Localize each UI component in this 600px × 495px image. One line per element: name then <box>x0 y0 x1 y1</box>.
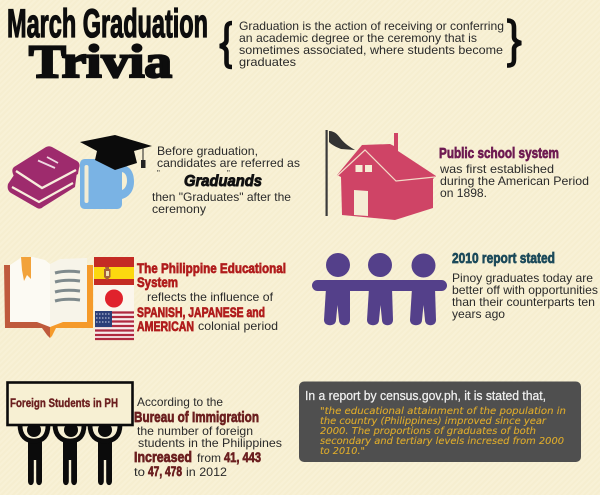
philippine educational system text block: The Philippine Educational <box>137 260 286 276</box>
definition text block: Graduation is the action of receiving or conferring <box>239 19 504 33</box>
2010 report text block: better off with opportunities <box>452 283 598 297</box>
graduands text block: Graduands <box>184 173 262 190</box>
title: Trivia <box>29 36 172 88</box>
graduands text block: candidates are referred as <box>157 156 300 170</box>
icon: Japanese flag <box>94 285 134 311</box>
definition text block <box>220 19 521 69</box>
foreign students text block: students in the Philippines <box>138 436 282 450</box>
foreign students text block: 47, 478 <box>148 463 182 479</box>
philippine educational system text block: SPANISH, JAPANESE and <box>137 304 265 320</box>
philippine educational system text block: colonial period <box>198 319 278 333</box>
graduands text block <box>152 144 300 216</box>
2010 report text block <box>452 250 598 321</box>
public school system text block: Public school system <box>439 145 559 162</box>
panel: census report callout <box>299 382 581 462</box>
foreign students text block: in 2012 <box>186 465 227 479</box>
icon: blue mug <box>80 159 134 209</box>
public school system text block: during the American Period <box>440 174 589 188</box>
panel: census report callout: 2000. The proportions of graduates of both <box>320 426 536 437</box>
icon: schoolhouse with flag <box>326 130 436 220</box>
philippine educational system text block: reflects the influence of <box>147 290 274 304</box>
philippine educational system text block: System <box>137 274 178 290</box>
foreign students text block <box>134 395 282 479</box>
graduands text block: Before graduation, <box>157 144 258 158</box>
graduands text block: " <box>227 169 230 178</box>
icon: stack of books <box>8 146 80 209</box>
title: March Graduation <box>7 2 208 46</box>
icon: three people holding sign <box>20 423 120 485</box>
panel: census report callout: In a report by census.gov.ph, it is stated that, <box>305 389 546 403</box>
title <box>7 2 208 88</box>
2010 report text block: 2010 report stated <box>452 250 555 267</box>
2010 report text block: than their counterparts ten <box>452 295 595 309</box>
panel: census report callout: to 2010." <box>320 446 365 457</box>
definition text block: graduates <box>239 55 296 69</box>
icon: three people linked <box>312 253 447 325</box>
foreign students sign <box>8 382 132 425</box>
foreign students text block: from <box>197 451 221 465</box>
foreign students text block: According to the <box>137 395 223 409</box>
graduands text block: then "Graduates" after the <box>152 190 291 204</box>
icon: American flag <box>95 311 134 340</box>
panel: census report callout: the country (Philippines) improved since year <box>320 416 547 427</box>
panel: census report callout: "the educational attainment of the population in <box>320 406 566 417</box>
philippine educational system text block <box>137 260 286 334</box>
icon: Spanish flag <box>94 257 134 285</box>
foreign students text block: Increased <box>134 449 192 466</box>
icon: open book <box>4 257 93 338</box>
definition text block: sometimes associated, where students become <box>239 43 503 57</box>
public school system text block: was first established <box>439 162 554 176</box>
graduands text block: ceremony <box>152 202 206 216</box>
icon: graduation cap <box>80 135 152 170</box>
philippine educational system text block: AMERICAN <box>137 318 194 334</box>
2010 report text block: years ago <box>452 307 505 321</box>
foreign students text block: to <box>134 465 145 479</box>
graduands text block: " <box>157 169 160 178</box>
foreign students text block: Bureau of Immigration <box>134 409 259 426</box>
foreign students text block: 41, 443 <box>224 449 261 465</box>
foreign students text block: the number of foreign <box>137 424 253 438</box>
public school system text block: on 1898. <box>440 186 487 200</box>
2010 report text block: Pinoy graduates today are <box>452 271 593 285</box>
definition text block: an academic degree or the ceremony that is <box>239 31 477 45</box>
panel: census report callout: secondary and tertiary levels incresed from 2000 <box>320 436 564 447</box>
public school system text block <box>439 145 589 200</box>
foreign students sign: Foreign Students in PH <box>10 396 118 410</box>
